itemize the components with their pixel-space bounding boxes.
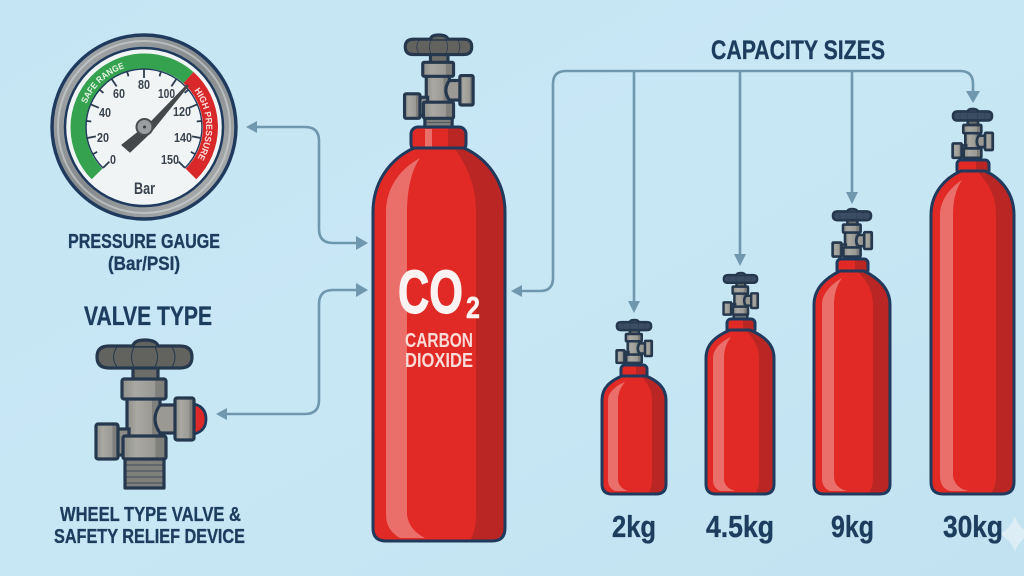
arrow: gauge to cylinder: [246, 121, 368, 250]
heading: capacity sizes: CAPACITY SIZES: [711, 35, 885, 65]
text: pressure gauge label: (Bar/PSI): [108, 254, 180, 275]
cylinder: 9kg: [814, 209, 890, 494]
label: 9kg: 9kg: [831, 509, 874, 544]
dial numbers: 150: [161, 152, 179, 167]
panel: pressure gauge: [50, 33, 238, 221]
high pressure arc: [188, 78, 210, 174]
body: [373, 148, 505, 541]
high pressure label: HIGH PRESSURE: [194, 87, 212, 161]
gauge bezel: [52, 35, 236, 219]
cylinder: 2kg: [602, 320, 666, 494]
carbon dioxide label: [405, 330, 473, 372]
text: valve description: SAFETY RELIEF DEVICE: [54, 526, 245, 548]
text: valve description: [54, 504, 245, 548]
dial numbers: 140: [174, 130, 192, 145]
dial numbers: 80: [138, 77, 150, 92]
dial numbers: 0: [110, 152, 116, 167]
heading: valve type: VALVE TYPE: [84, 301, 212, 331]
text: pressure gauge label: [68, 231, 220, 275]
carbon dioxide label: CARBON: [405, 330, 473, 352]
valve: [405, 35, 473, 139]
dial numbers: [97, 77, 192, 167]
dial numbers: 60: [113, 86, 125, 101]
needle: [122, 85, 188, 152]
icon: sparkle: [1000, 516, 1024, 552]
CO2 formula: CO: [398, 258, 463, 326]
label: 2kg: 2kg: [612, 509, 656, 544]
neck: [411, 127, 466, 151]
cylinder: 30kg: [931, 109, 1014, 494]
safe range arc: [78, 61, 188, 174]
dial numbers: 20: [97, 130, 109, 145]
dial ticks: [86, 69, 202, 168]
unit label: Bar: [134, 179, 155, 198]
icon: wheel type valve with safety relief: [96, 340, 206, 488]
label: 4.5kg: 4.5kg: [706, 509, 774, 544]
dial inner ring: [86, 69, 202, 168]
text: valve description: WHEEL TYPE VALVE &: [60, 504, 241, 526]
safe range label: SAFE RANGE: [82, 62, 124, 103]
arrow: valve to cylinder: [216, 283, 368, 420]
label: 30kg: 30kg: [943, 509, 1003, 544]
CO2 formula: 2: [466, 290, 480, 325]
main CO2 cylinder: [373, 35, 505, 541]
dial numbers: 100: [158, 86, 175, 101]
text: pressure gauge label: PRESSURE GAUGE: [68, 231, 220, 253]
cylinder: 4.5kg: [706, 273, 774, 494]
dial numbers: 40: [99, 105, 111, 120]
dial numbers: 120: [173, 104, 191, 119]
arrow: main cylinder to capacity sizes: [511, 71, 980, 313]
carbon dioxide label: DIOXIDE: [405, 350, 473, 372]
